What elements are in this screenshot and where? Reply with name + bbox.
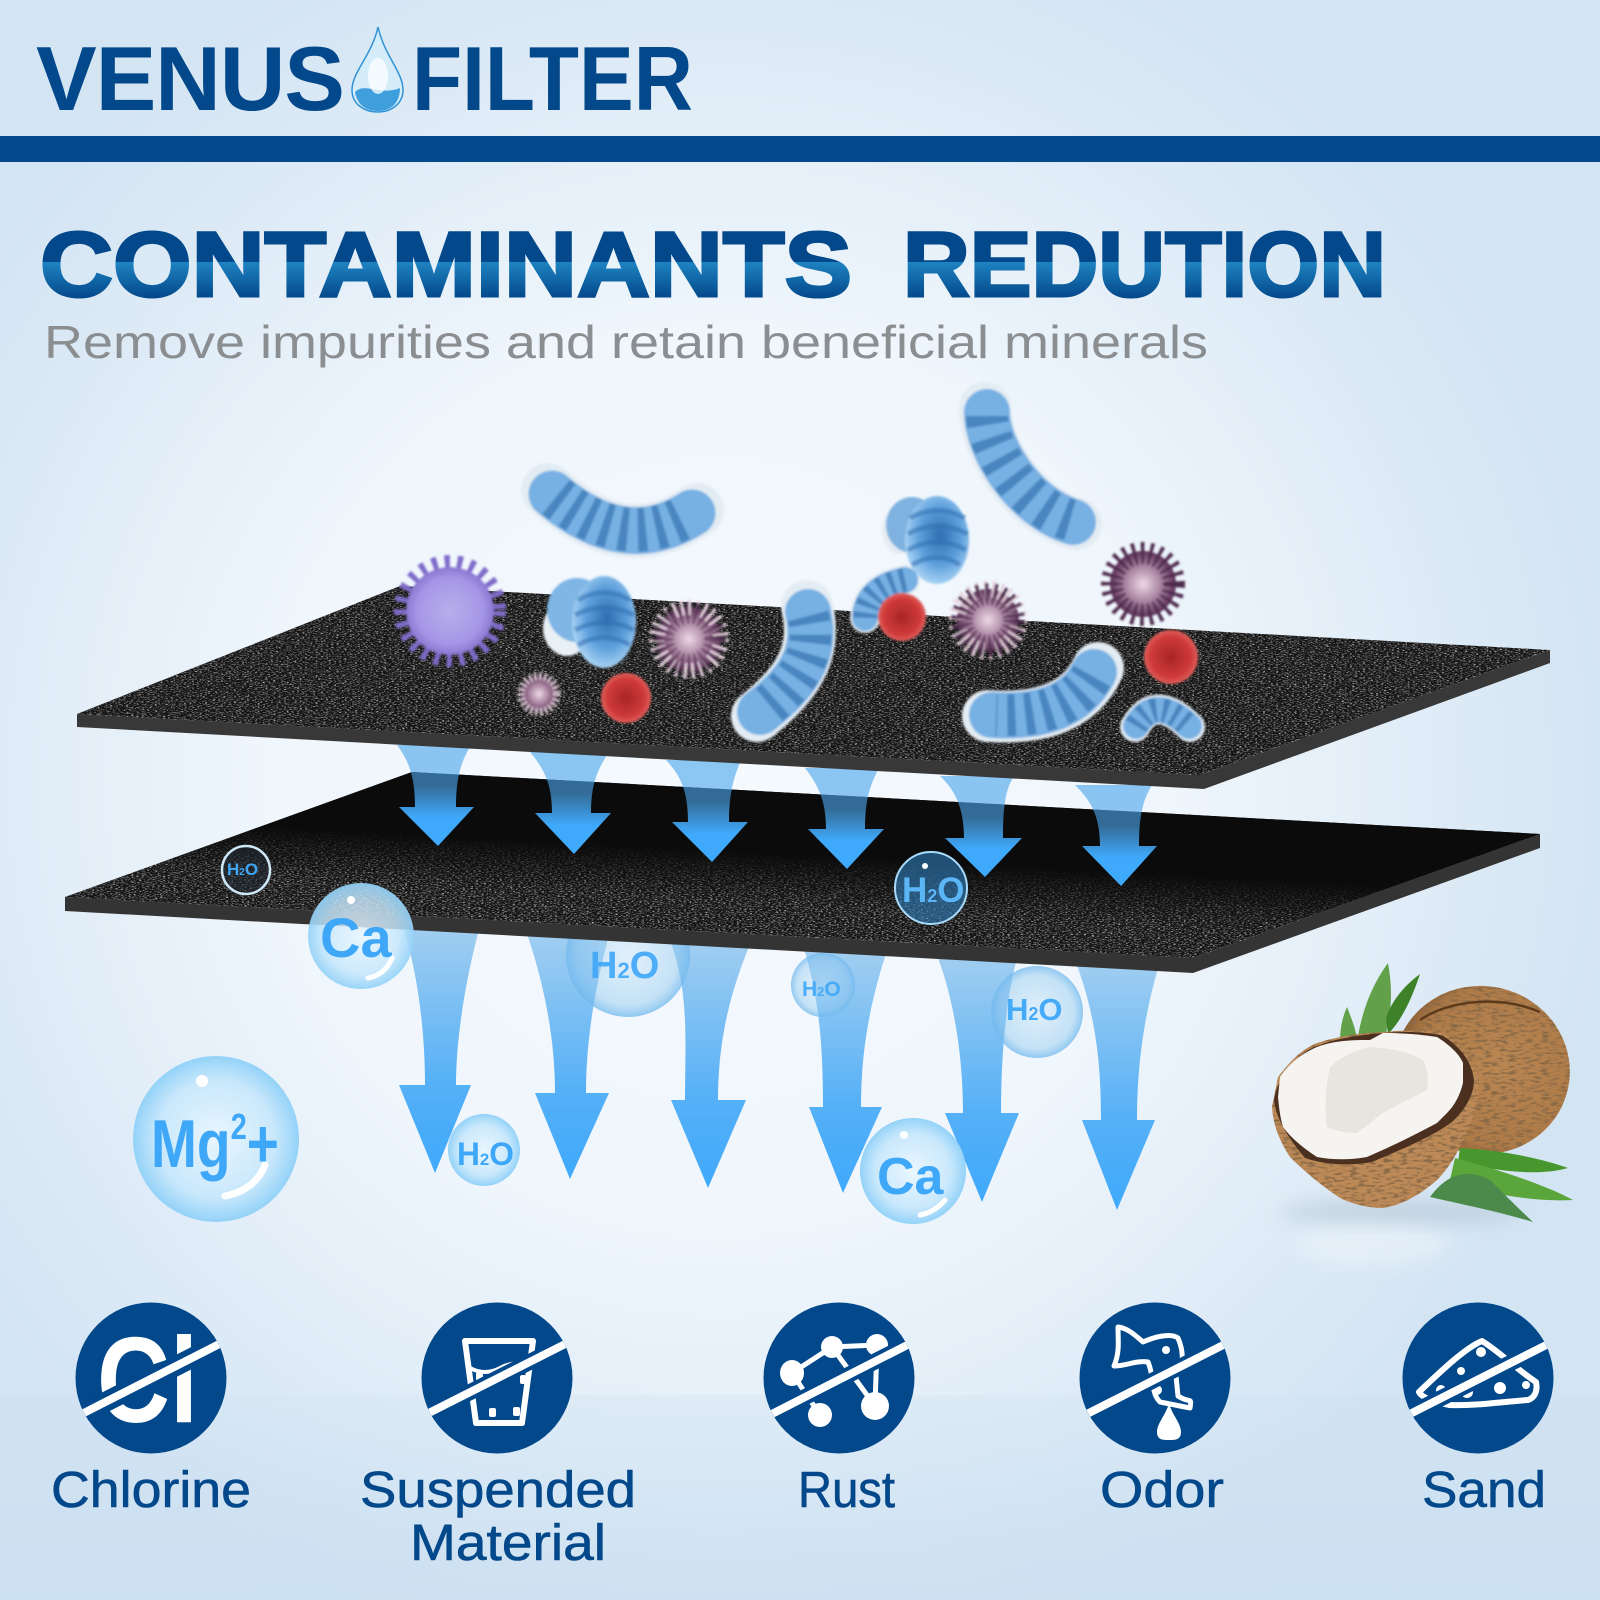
label: chlorine: Chlorine [51, 1461, 251, 1518]
bubble: H2O on sheet right [895, 852, 967, 924]
label: suspended material: Material [410, 1514, 606, 1571]
bubble: H2O centre: H2O [802, 978, 841, 1001]
icon: suspended material [415, 1302, 581, 1454]
bubble: H2O on sheet small: H2O [227, 860, 258, 879]
coconut half shell [1270, 1030, 1480, 1210]
bubble: Ca lower centre [860, 1118, 966, 1224]
header bar [0, 136, 1600, 162]
icon: rust [760, 1302, 925, 1454]
bubble: H2O right [991, 966, 1083, 1058]
label: suspended material: Suspended [360, 1461, 636, 1518]
bacterium: coiled left [543, 576, 636, 668]
label: suspended material [360, 1461, 636, 1571]
bubble: Ca on sheet edge: Ca [320, 906, 392, 969]
contaminants [403, 408, 1198, 727]
contaminant icons row [51, 1302, 1564, 1571]
bubble: H2O on sheet small [222, 846, 270, 894]
virus: spiky 1 [657, 607, 721, 671]
virus: spiky 3 [1110, 551, 1176, 617]
label: sand: Sand [1422, 1461, 1546, 1518]
bacterium: coiled top [882, 496, 969, 584]
virus: purple [403, 564, 497, 658]
bubble: H2O large: H2O [590, 945, 659, 987]
icon: water drop [352, 27, 403, 112]
filter sheet: upper [70, 580, 1555, 789]
bubble: Ca lower centre: Ca [877, 1148, 945, 1206]
bubbles behind lower sheet [566, 893, 1083, 1058]
subtitle: Remove impurities and retain beneficial minerals [44, 316, 1208, 368]
bubble: Mg2+ [133, 1056, 299, 1222]
upper flow arrows [397, 745, 1157, 886]
title: REDUTION [903, 214, 1386, 316]
icon: chlorine: Cl [97, 1312, 198, 1448]
logo word: FILTER: FILTER [412, 29, 693, 130]
bubble: H2O lower left: H2O [457, 1136, 514, 1172]
coconut flesh [1278, 1033, 1463, 1159]
whole coconut [1404, 986, 1570, 1152]
logo: Venus Filter [36, 27, 693, 130]
lower flow arrows [399, 922, 1162, 1210]
coconut illustration [1270, 963, 1586, 1265]
coconut rim [1274, 1032, 1474, 1164]
particle: red 2 [878, 593, 926, 641]
title: CONTAMINANTS [40, 214, 852, 316]
filter sheet: lower [60, 765, 1545, 973]
coconut bottom leaves [1430, 1148, 1573, 1222]
bubble: Mg2+: 2 [231, 1106, 247, 1147]
icon: odor [1075, 1302, 1241, 1454]
virus: small [521, 676, 557, 712]
bubble: H2O right: H2O [1006, 992, 1063, 1027]
label: rust: Rust [798, 1461, 895, 1518]
label: odor: Odor [1100, 1461, 1224, 1518]
bubble: Ca on sheet edge [308, 883, 414, 989]
bacterium: long top right [985, 408, 1076, 524]
bubble: H2O large [566, 893, 690, 1017]
bubble: H2O centre [791, 953, 855, 1017]
bubble: H2O lower left [448, 1114, 520, 1186]
particle: red 1 [601, 673, 651, 723]
virus: spiky 2 [957, 589, 1019, 651]
logo word: VENUS: VENUS [36, 29, 345, 130]
bacterium: small arc right [1135, 710, 1190, 727]
bubble: H2O on sheet right: H2O [902, 871, 965, 910]
bubble: Mg2+: Mg [151, 1106, 249, 1182]
coconut top leaves [1340, 963, 1420, 1042]
bubble: Mg2+: + [247, 1106, 279, 1182]
bacterium: curved centre [757, 606, 811, 716]
icon: sand [1398, 1302, 1564, 1454]
bacterium: small tail [865, 580, 905, 618]
bacterium: curved lower right [988, 668, 1098, 717]
title [40, 214, 1386, 316]
coconut shadow and reflection [1280, 1200, 1520, 1265]
bacterium: arched top left [548, 490, 697, 531]
icon: chlorine [70, 1302, 235, 1454]
particle: red 3 [1144, 630, 1198, 684]
